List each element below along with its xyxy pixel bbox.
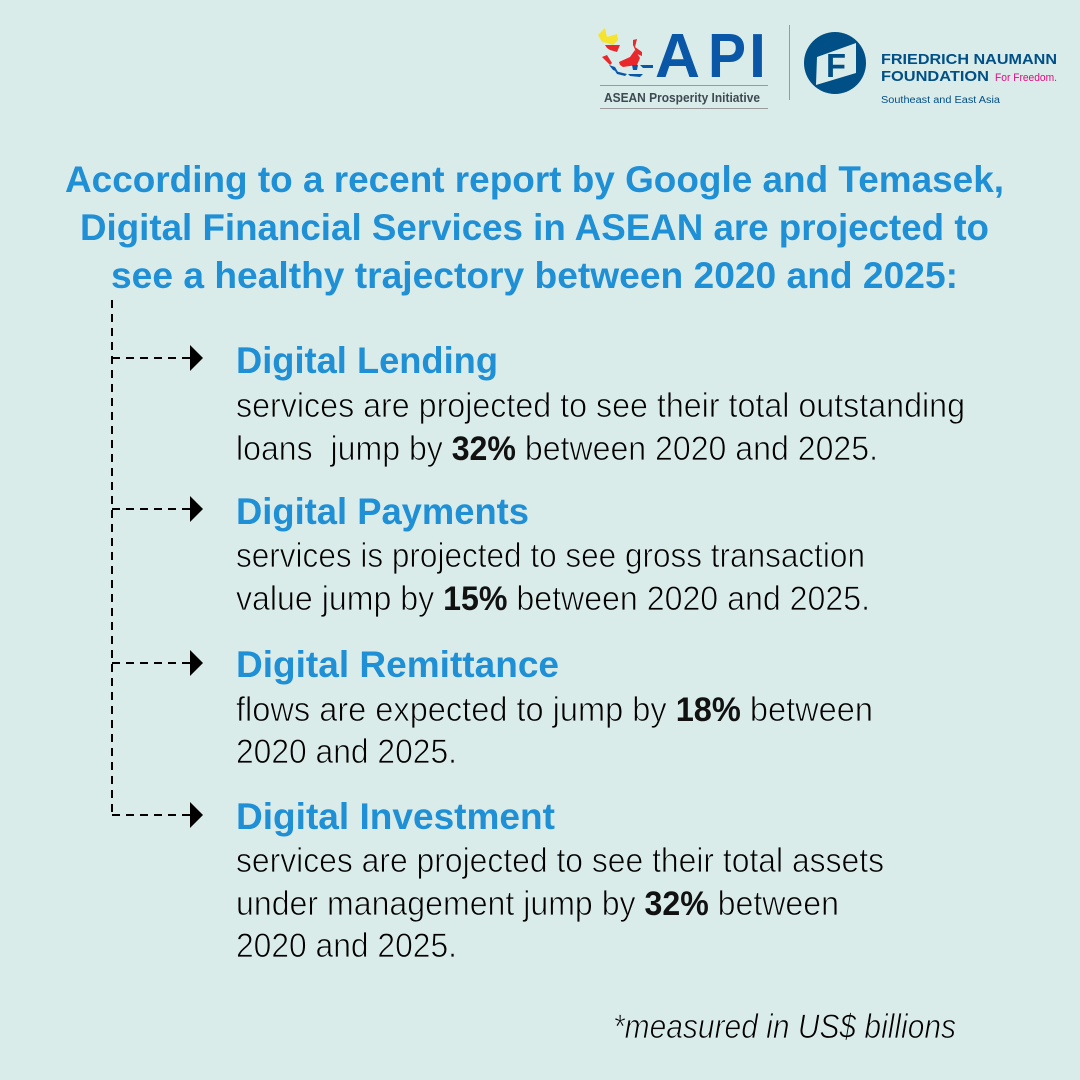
arrow: digital payments <box>112 496 203 522</box>
item: digital investment: services are projected to see their total assets <box>236 842 884 880</box>
item: digital investment <box>236 796 884 965</box>
item: digital investment: 2020 and 2025. <box>236 927 457 965</box>
icon: F badge: F <box>826 47 846 84</box>
icon: ASEAN map <box>598 28 653 77</box>
item: digital payments <box>236 491 870 618</box>
logo caption: ASEAN Prosperity Initiative <box>604 91 760 105</box>
item: digital remittance: Digital Remittance <box>236 644 559 685</box>
connector: dashed trunk <box>111 300 113 815</box>
item: digital lending: services are projected to see their total outstanding <box>236 387 965 425</box>
arrow: digital lending <box>112 345 203 371</box>
item: digital lending: loans jump by 32% between 2020 and 2025. <box>236 430 878 468</box>
tagline: For Freedom. <box>995 72 1057 84</box>
logo wordmark: API <box>655 22 766 91</box>
arrow: digital investment <box>112 802 203 828</box>
item: digital lending: Digital Lending <box>236 340 498 381</box>
title: see a healthy trajectory between 2020 and 2025: <box>111 255 958 296</box>
arrow: digital remittance <box>112 650 203 676</box>
item: digital payments: services is projected to see gross transaction <box>236 537 865 575</box>
logo: ASEAN Prosperity Initiative <box>598 22 768 109</box>
logo: Friedrich Naumann Foundation <box>804 32 1057 106</box>
icon: F badge <box>804 32 866 94</box>
item: digital payments: value jump by 15% between 2020 and 2025. <box>236 580 870 618</box>
footnote: *measured in US$ billions <box>613 1008 956 1046</box>
item: digital investment: under management jump by 32% between <box>236 885 839 923</box>
title: According to a recent report by Google and Temasek, <box>65 159 1004 200</box>
logo wordmark: API: A <box>655 22 700 91</box>
title <box>65 159 1004 296</box>
item: digital investment: Digital Investment <box>236 796 555 837</box>
item: digital remittance: flows are expected to jump by 18% between <box>236 691 873 729</box>
region: Southeast and East Asia <box>881 95 1000 106</box>
foundation name line 2: FOUNDATION <box>881 68 989 85</box>
divider rule bottom <box>600 108 768 109</box>
item: digital remittance: 2020 and 2025. <box>236 733 457 771</box>
vertical divider between logos <box>789 25 790 100</box>
divider rule top <box>600 85 768 86</box>
logo wordmark: API: P <box>708 22 746 91</box>
foundation name line 1: FRIEDRICH NAUMANN <box>881 51 1057 68</box>
item: digital payments: Digital Payments <box>236 491 529 532</box>
title: Digital Financial Services in ASEAN are projected to <box>80 207 989 248</box>
item: digital remittance <box>236 644 873 771</box>
item: digital lending <box>236 340 965 468</box>
logo wordmark: API: I <box>749 22 766 91</box>
